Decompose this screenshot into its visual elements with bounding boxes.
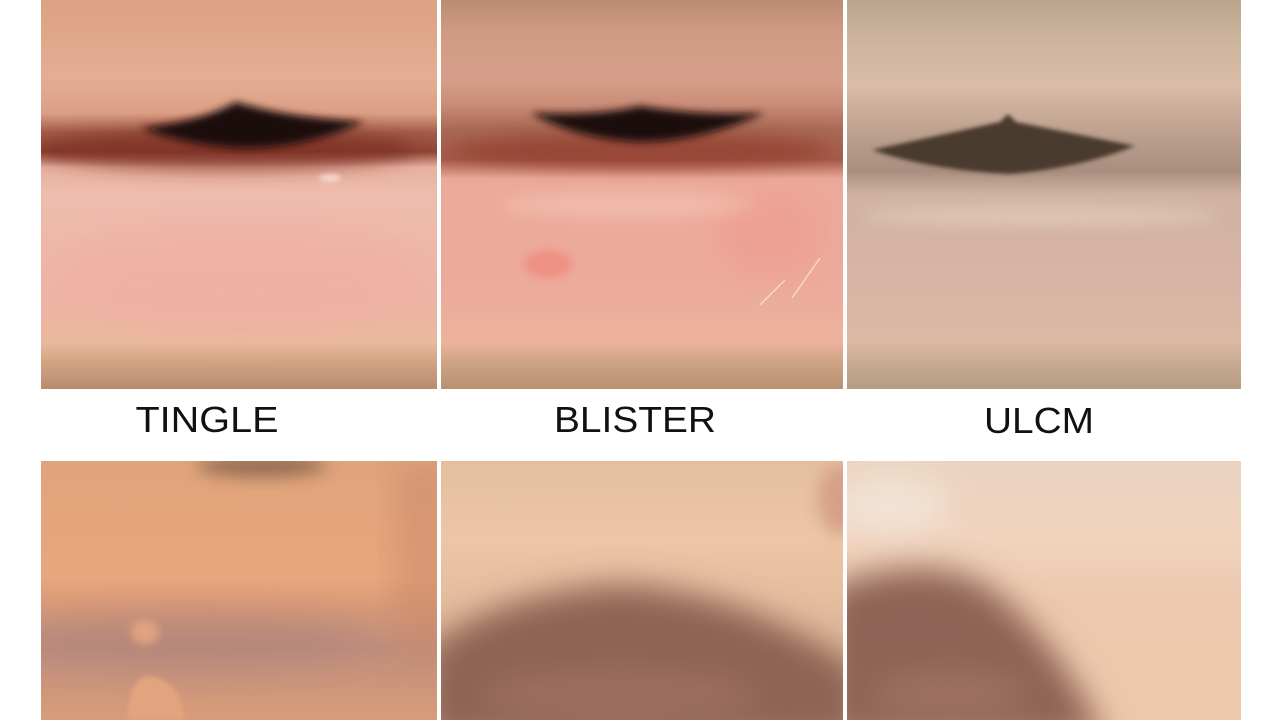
highlight spot	[319, 174, 341, 182]
panel: top left lips	[35, 0, 437, 389]
red patch	[739, 208, 801, 256]
panel: top right lips	[847, 0, 1241, 389]
panel: bottom left skin	[41, 461, 437, 720]
label: BLISTER: BLISTER	[554, 399, 716, 440]
cracks	[760, 258, 820, 305]
inner lip shadow	[35, 130, 415, 170]
lower lip sheen	[502, 672, 738, 716]
mouth opening	[140, 102, 365, 148]
lip shape	[425, 585, 860, 720]
lip shadow	[41, 610, 342, 662]
nostril shadow	[197, 455, 327, 477]
lip shape	[825, 569, 1105, 720]
lower lip pink	[60, 220, 420, 330]
panel: top centre lips	[441, 0, 843, 389]
mouth opening	[872, 114, 1135, 174]
glossy patches	[860, 207, 1220, 225]
glossy patches	[500, 193, 760, 217]
lower bump	[128, 676, 184, 720]
blister bump	[131, 620, 159, 644]
lower lip sheen	[885, 672, 1015, 714]
panel: bottom centre skin	[425, 461, 862, 720]
label: TINGLE: TINGLE	[136, 399, 278, 440]
pale highlight	[830, 475, 950, 535]
corner shade	[813, 462, 843, 539]
panel: bottom right skin	[825, 461, 1241, 720]
mouth opening	[530, 106, 765, 142]
inner lip shadow	[450, 132, 830, 168]
right edge shade	[394, 463, 437, 646]
blister	[524, 250, 572, 278]
label: ULCM: ULCM	[984, 400, 1094, 441]
